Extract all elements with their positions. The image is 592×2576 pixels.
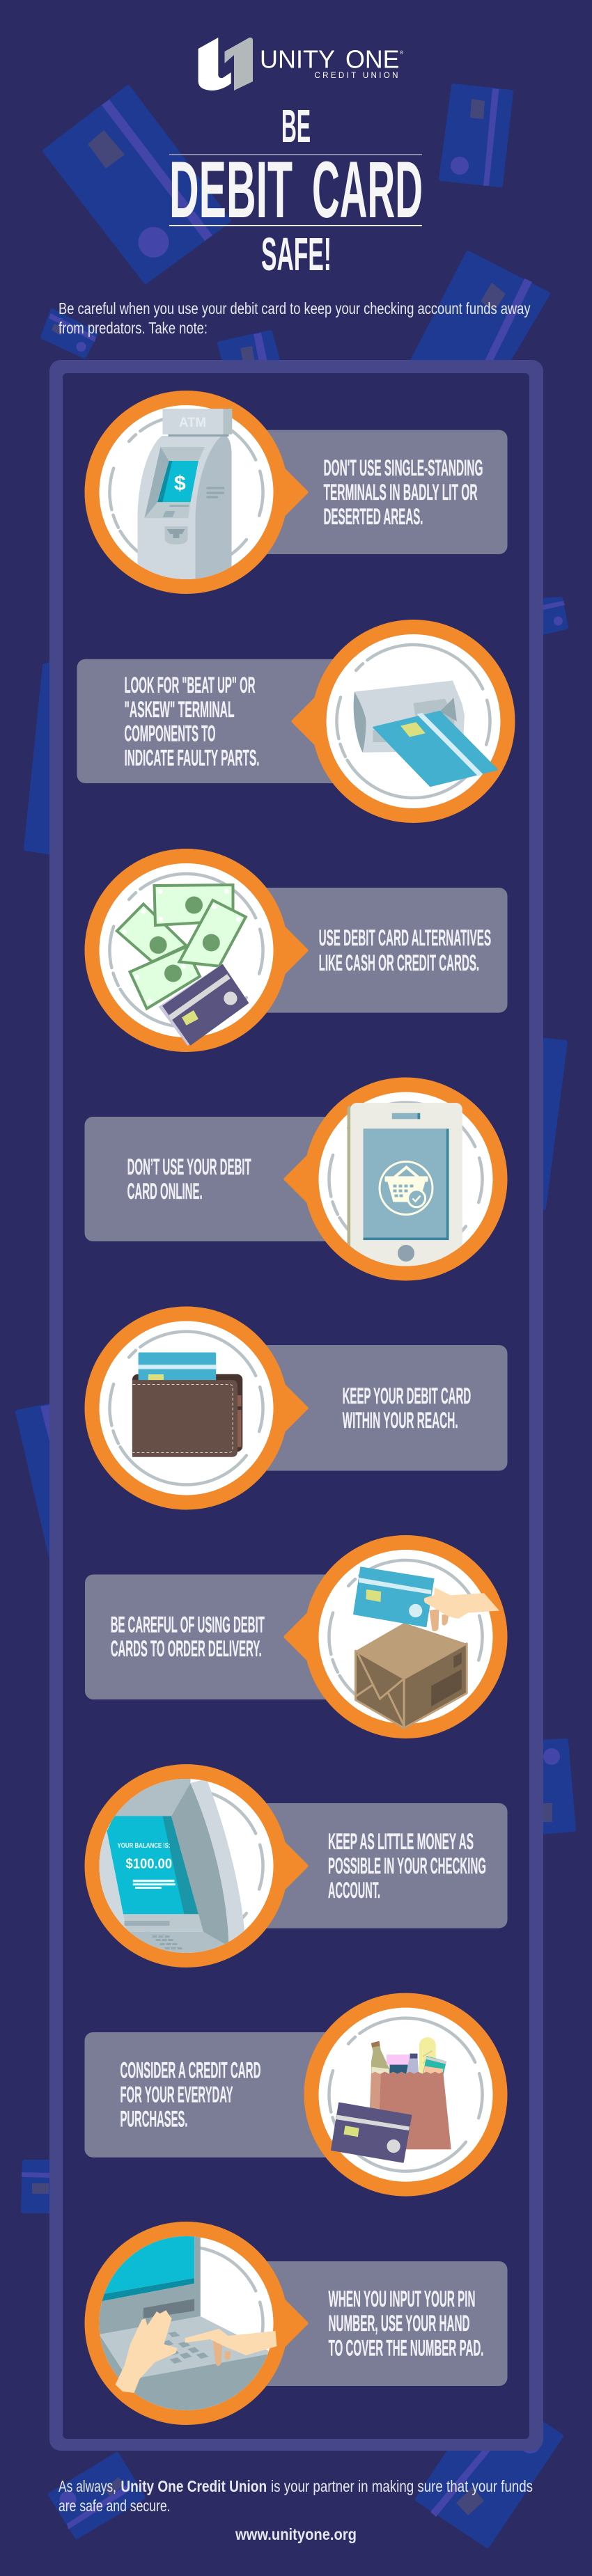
text box bbox=[223, 1803, 507, 1929]
logo mark grey bbox=[224, 38, 253, 91]
tip 5: wallet bbox=[85, 1306, 507, 1509]
tip text bbox=[328, 1829, 486, 1903]
icon: ATM bbox=[85, 391, 309, 594]
tip 6: delivery: BE CAREFUL OF USING DEBIT bbox=[111, 1612, 265, 1638]
tip 2: faulty parts bbox=[77, 620, 515, 823]
tip text: "ASKEW" TERMINAL bbox=[124, 697, 234, 722]
intro text: from predators. Take note: bbox=[59, 319, 208, 337]
logo wordmark bbox=[260, 45, 400, 73]
logo mark white bbox=[198, 38, 231, 91]
tip text bbox=[111, 1612, 265, 1661]
tip 7: little money bbox=[85, 1764, 507, 1968]
tip text bbox=[124, 673, 259, 770]
title line: safe: SAFE! bbox=[261, 228, 332, 281]
icon: cash and card bbox=[85, 849, 309, 1052]
icon: phone with shopping basket bbox=[283, 1078, 507, 1281]
tip 2: faulty parts: INDICATE FAULTY PARTS. bbox=[124, 745, 259, 770]
logo wordmark: ONE bbox=[345, 45, 400, 73]
text box bbox=[223, 888, 507, 1013]
main panel bbox=[49, 360, 543, 2451]
logo wordmark: UNITY bbox=[260, 45, 335, 73]
logo registered mark: ® bbox=[400, 50, 404, 56]
icon: ATM balance screen: YOUR BALANCE IS: bbox=[117, 1842, 170, 1850]
text box bbox=[223, 430, 507, 554]
icon: card reader bbox=[291, 620, 515, 823]
text box bbox=[223, 1345, 507, 1470]
tip 4: online bbox=[85, 1078, 507, 1281]
logo bbox=[198, 38, 404, 91]
icon: ATM balance screen: $100.00 bbox=[125, 1856, 172, 1871]
title bbox=[169, 100, 423, 281]
tip text bbox=[120, 2058, 260, 2132]
text box bbox=[223, 2261, 507, 2386]
tip text bbox=[319, 925, 491, 975]
text box bbox=[85, 2032, 364, 2158]
closing text: As always, bbox=[59, 2477, 116, 2495]
text box bbox=[85, 1117, 364, 1241]
tip text bbox=[343, 1383, 471, 1433]
icon: ATM: $ bbox=[174, 472, 186, 495]
tip text: ACCOUNT. bbox=[328, 1878, 380, 1903]
closing text bbox=[59, 2477, 533, 2515]
logo subtitle: CREDIT UNION bbox=[315, 71, 398, 80]
tip 6: delivery bbox=[85, 1535, 507, 1738]
text: CARD bbox=[312, 146, 423, 235]
closing text: is your partner in making sure that your funds bbox=[271, 2477, 533, 2495]
tip text bbox=[323, 455, 483, 529]
text box bbox=[85, 1575, 364, 1699]
closing text: Unity One Credit Union bbox=[120, 2477, 267, 2495]
website: www.unityone.org bbox=[235, 2525, 357, 2543]
icon: hands over keypad bbox=[85, 2222, 309, 2425]
tip text: CARD ONLINE. bbox=[127, 1179, 203, 1204]
text box bbox=[77, 659, 369, 783]
tip text: DESERTED AREAS. bbox=[323, 504, 423, 529]
tip 8: credit card: CONSIDER A CREDIT CARD bbox=[120, 2058, 260, 2083]
tip text: PURCHASES. bbox=[120, 2107, 188, 2132]
tip 4: online: DON’T USE YOUR DEBIT bbox=[127, 1154, 251, 1179]
tip text bbox=[329, 2286, 483, 2361]
icon: ATM: ATM bbox=[179, 416, 206, 430]
title: BE bbox=[281, 100, 311, 152]
tip 1: terminals bbox=[85, 391, 507, 594]
title line: debit card: DEBIT bbox=[169, 146, 293, 235]
icon: ATM balance screen bbox=[85, 1764, 309, 1968]
intro text bbox=[59, 299, 531, 337]
icon: parcel and hand with card bbox=[283, 1535, 507, 1738]
tip 2: faulty parts: LOOK FOR "BEAT UP" OR bbox=[124, 673, 255, 698]
tip text: FOR YOUR EVERYDAY bbox=[120, 2082, 233, 2107]
tip text: COMPONENTS TO bbox=[124, 721, 216, 746]
tip 8: credit card bbox=[85, 1993, 507, 2197]
icon: grocery bag and card bbox=[304, 1993, 507, 2197]
tip 3: alternatives bbox=[85, 849, 507, 1052]
tip 9: cover the pad bbox=[85, 2222, 507, 2425]
icon: wallet bbox=[85, 1306, 309, 1509]
tip text: WITHIN YOUR REACH. bbox=[343, 1408, 458, 1433]
closing text: are safe and secure. bbox=[59, 2497, 170, 2515]
tip 6: delivery: CARDS TO ORDER DELIVERY. bbox=[111, 1636, 262, 1661]
tip text bbox=[127, 1154, 251, 1204]
